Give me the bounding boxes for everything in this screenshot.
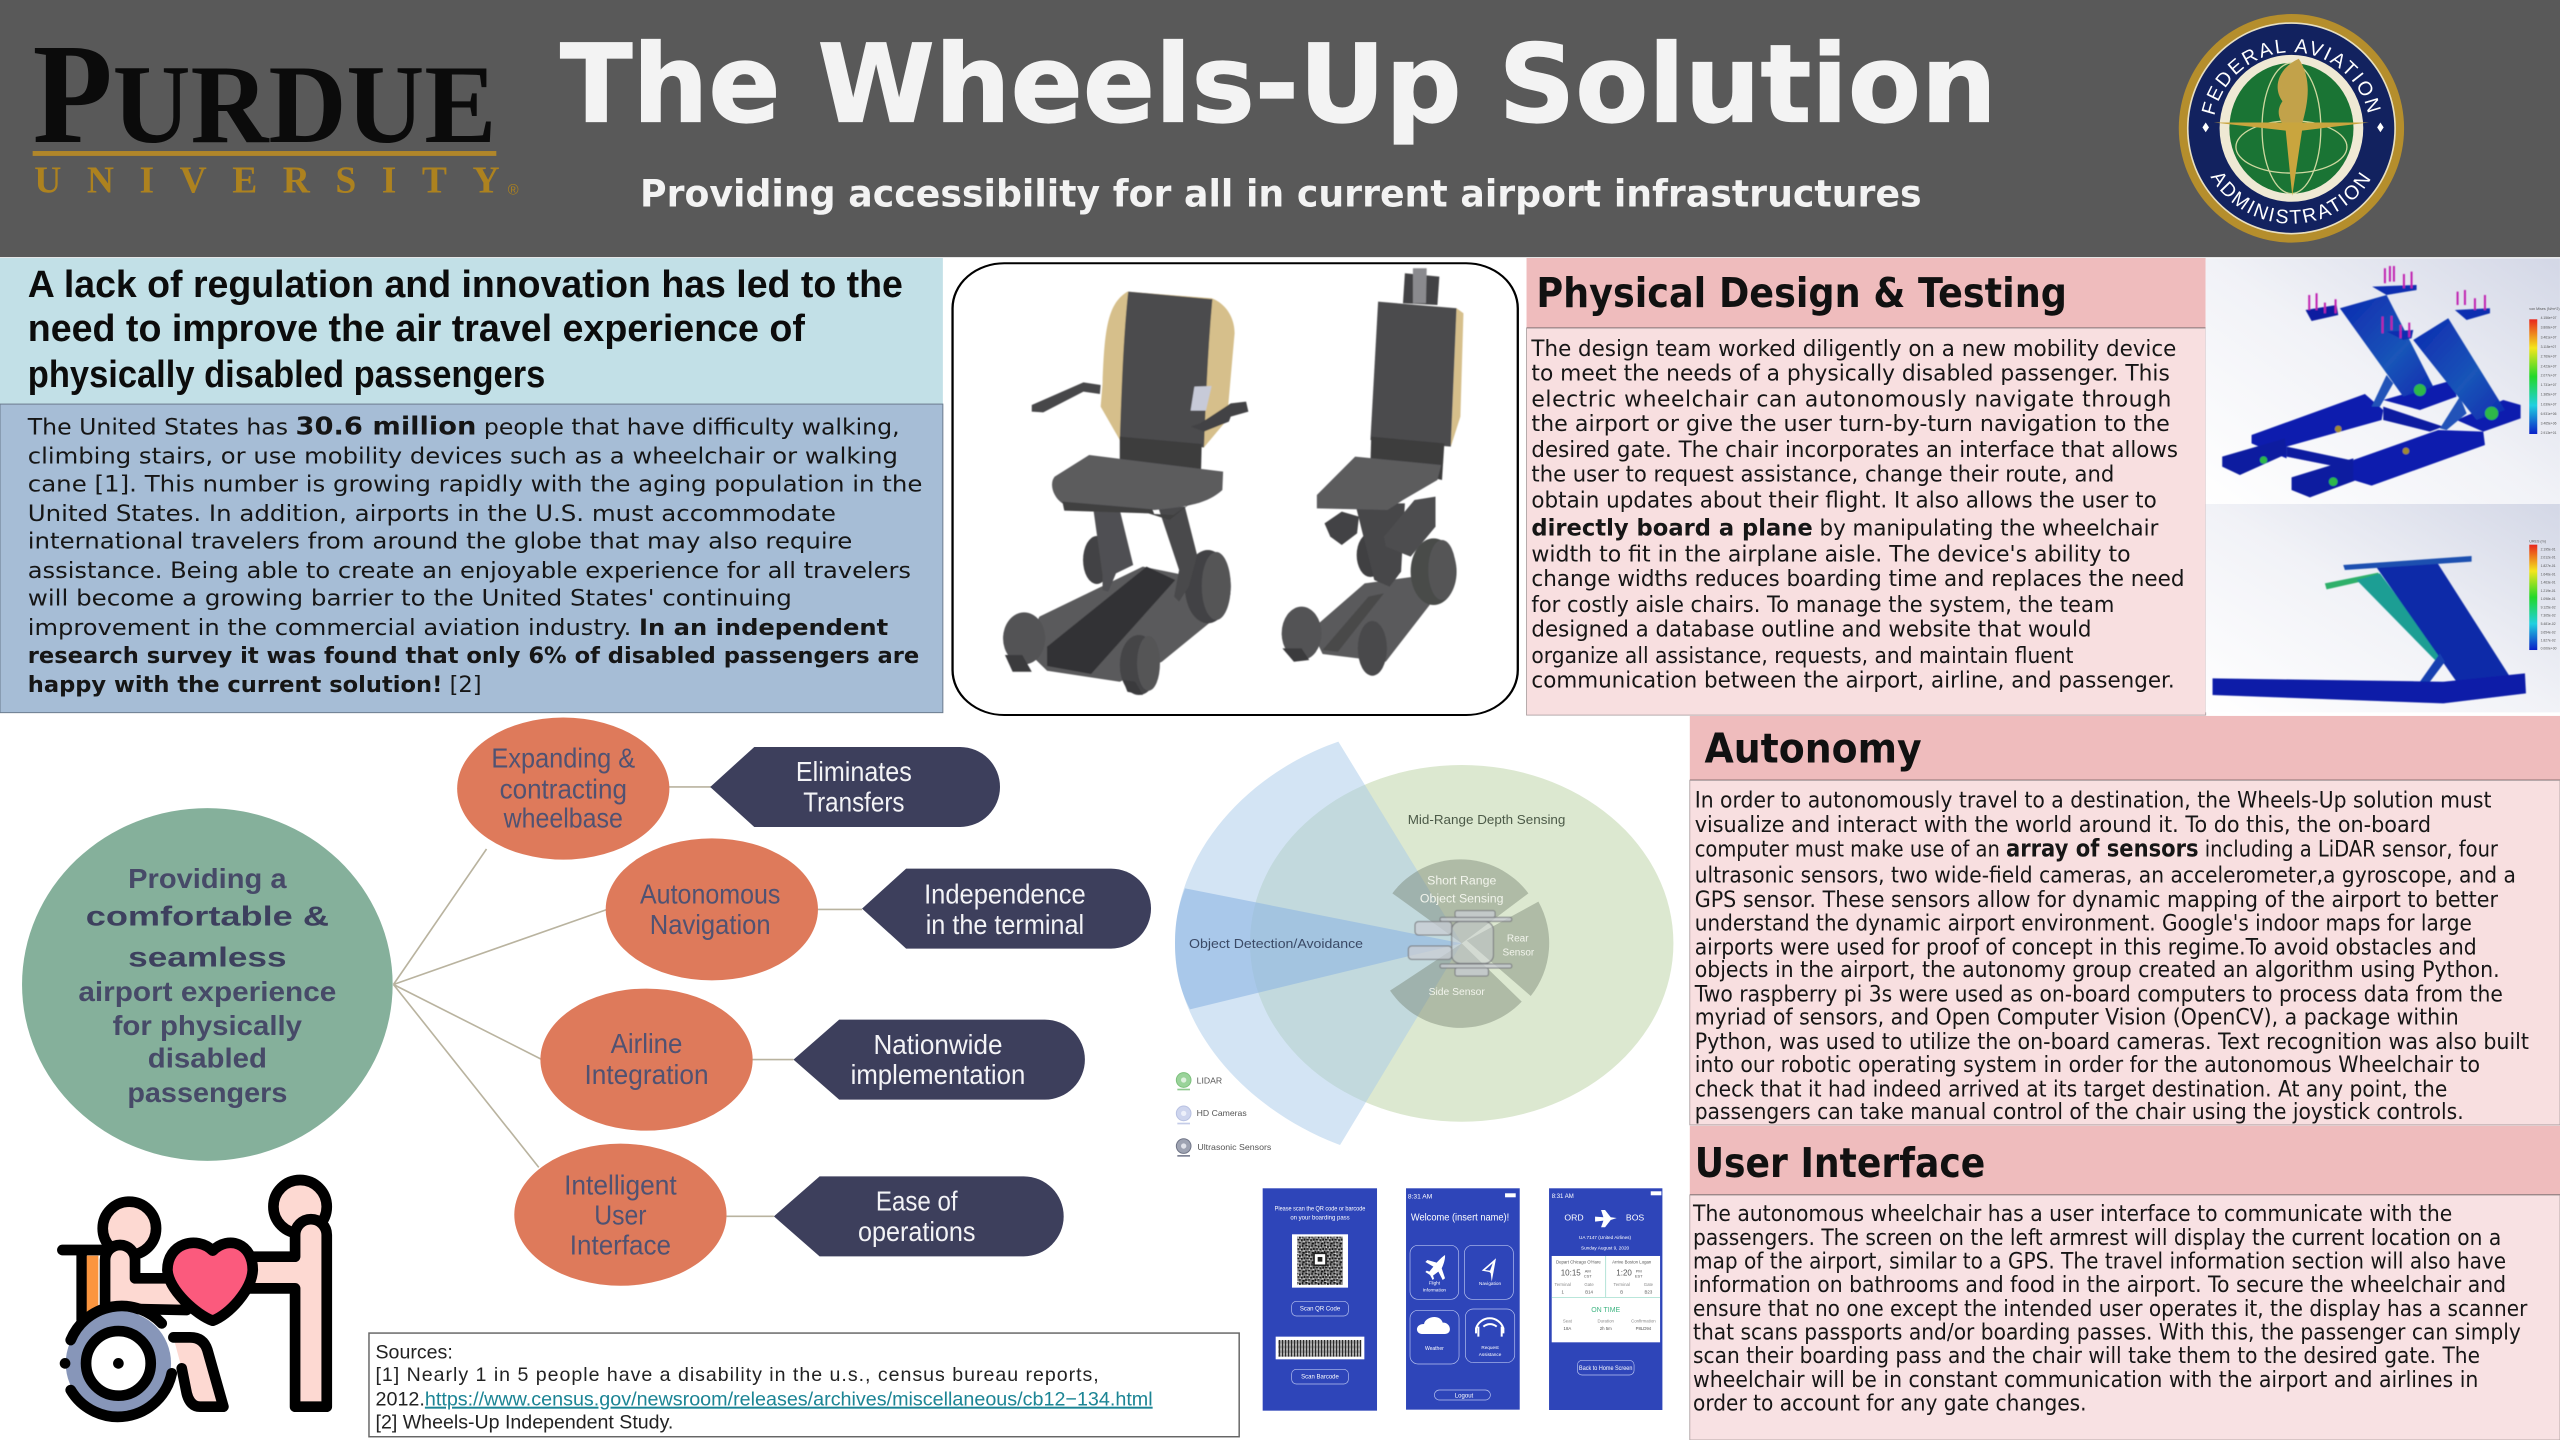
physical design body text: desired gate. The chair incorporates an interface that allows (1531, 438, 2178, 463)
phone: flight information: Gate (1644, 1282, 1654, 1287)
node: expanding wheelbase: contracting (500, 773, 627, 804)
autonomy body text (1690, 780, 2560, 1125)
user interface body text: wheelchair will be in constant communication with the airport and airlines in (1693, 1368, 2478, 1393)
legend: ultrasonic sensors (1176, 1139, 1272, 1157)
central node (22, 808, 393, 1161)
problem heading: need to improve the air travel experience of (28, 307, 805, 350)
legend: LIDAR: LIDAR (1197, 1075, 1222, 1085)
autonomy body text: myriad of sensors, and Open Computer Vision (OpenCV), a package within (1695, 1005, 2459, 1030)
tag: independence in the terminal (862, 869, 1151, 949)
phone: welcome menu: Assistance (1479, 1352, 1502, 1357)
problem body text: climbing stairs, or use mobility devices such as a wheelchair or walking (28, 445, 898, 470)
autonomy body text: objects in the airport, the autonomy group created an algorithm using Python. (1695, 958, 2500, 983)
phone: flight information: 1:20 (1616, 1269, 1632, 1278)
displacement legend: 1.463e-01 (2541, 581, 2556, 585)
stress legend: 1.039e+07 (2541, 402, 2557, 406)
phone: flight information (1549, 1188, 1662, 1410)
phone: welcome menu: Logout (1455, 1393, 1474, 1399)
sources box: Sources: (376, 1341, 453, 1363)
panel: FEA stress simulation images (2206, 258, 2560, 712)
legend: HD cameras: HD Cameras (1197, 1108, 1247, 1118)
autonomy body text: Python, was used to utilize the on-board cameras. Text recognition was also built (1695, 1030, 2529, 1055)
autonomy body text: into our robotic operating system in order for the autonomous Wheelchair to (1695, 1053, 2480, 1078)
displacement legend: 1.827e-01 (2541, 564, 2556, 568)
sources box: [2] Wheels-Up Independent Study. (376, 1412, 673, 1434)
physical design heading (1527, 258, 2206, 328)
problem body text: cane [1]. This number is growing rapidly with the aging population in the (28, 472, 922, 497)
phone: flight information: ON TIME (1591, 1307, 1621, 1314)
user interface body text: scan their boarding pass and the chair will take them to the desired gate. The (1693, 1344, 2480, 1369)
phone: scan boarding pass: Please scan the QR code or barcode (1275, 1207, 1366, 1213)
logo: FAA seal (2178, 14, 2404, 243)
object detection zone (1175, 742, 1462, 1145)
displacement legend (2529, 539, 2557, 651)
phone: flight information: Gate (1584, 1282, 1594, 1287)
stress legend: 2.077e+07 (2541, 374, 2557, 378)
node: airline integration: Airline (611, 1028, 682, 1059)
sources box: [1] Nearly 1 in 5 people have a disability in the u.s., census bureau reports, (376, 1364, 1099, 1386)
phone: flight information: Terminal (1555, 1282, 1571, 1287)
sensor labels: Object Sensing (1420, 892, 1504, 906)
header banner (0, 0, 2560, 258)
phone: flight information: Terminal (1614, 1282, 1630, 1287)
displacement legend: 2.195e-01 (2541, 547, 2556, 551)
displacement legend: 1.827e-02 (2541, 639, 2556, 643)
phone: flight information: Duration (1598, 1319, 1614, 1324)
phone: welcome menu: Welcome (insert name)! (1411, 1213, 1509, 1224)
side sensor sector (1390, 943, 1522, 1028)
physical design body text: The design team worked diligently on a new mobility device (1530, 337, 2176, 362)
sensor labels: Rear (1507, 933, 1529, 944)
phone: welcome menu: Information (1423, 1287, 1446, 1292)
problem body text: international travelers from around the globe that may also require (28, 530, 852, 555)
node: expanding wheelbase: Expanding & (491, 742, 636, 773)
phone: flight information: P8LD94 (1636, 1326, 1652, 1331)
autonomy body text: Two raspberry pi 3s were used as on-board computers to process data from the (1694, 983, 2503, 1008)
phone: flight information: 10:15 (1561, 1269, 1581, 1278)
physical design body text (1527, 328, 2206, 715)
displacement legend: 2.012e-01 (2541, 556, 2556, 560)
sources box: 2012.https://www.census.gov/newsroom/releases/archives/miscellaneous/cb12−134.html (376, 1389, 1153, 1411)
problem body text (0, 404, 943, 713)
stress legend: 2.769e+07 (2541, 355, 2557, 359)
stress legend: 1.731e+07 (2541, 383, 2557, 387)
node: expanding wheelbase (457, 718, 669, 860)
problem heading (0, 258, 943, 404)
central node: Providing a (128, 863, 287, 894)
phone: flight information: Back to Home Screen (1579, 1366, 1632, 1372)
tag: ease of operations: Ease of (876, 1186, 958, 1217)
physical design body text: the airport or give the user turn-by-turn navigation to the (1531, 412, 2170, 437)
phone: welcome menu: 8:31 AM (1408, 1193, 1432, 1200)
logo: Purdue University: ® (508, 182, 519, 198)
phone: flight information: EST (1635, 1273, 1643, 1278)
node: intelligent user interface (514, 1144, 727, 1286)
problem body text: assistance. Being able to create an enjoyable experience for all travelers (28, 559, 911, 584)
phone: scan boarding pass: Scan Barcode (1301, 1375, 1340, 1381)
displacement legend: 9.125e-02 (2541, 605, 2556, 609)
phone: welcome menu: Flight (1429, 1281, 1441, 1286)
phone: flight information: Sunday August 9, 2020 (1581, 1245, 1630, 1250)
panel: user interface (1690, 1126, 2560, 1440)
sensor coverage diagram (1175, 742, 1673, 1157)
tag: eliminates transfers: Eliminates (796, 756, 912, 787)
central node: passengers (127, 1077, 287, 1108)
central node: airport experience (78, 976, 336, 1007)
stress legend: 4.156e+07 (2541, 316, 2557, 320)
user interface body text: order to account for any gate changes. (1693, 1392, 2087, 1417)
user interface body text: map of the airport, similar to a GPS. The travel information section will also have (1693, 1250, 2506, 1275)
physical design body text: width to fit in the airplane aisle. The device's ability to (1531, 543, 2131, 568)
problem body text: research survey it was found that only 6% of disabled passengers are (28, 644, 919, 669)
displacement legend: 3.654e-02 (2541, 630, 2556, 634)
displacement legend: 1.098e-01 (2541, 597, 2556, 601)
user interface body text: The autonomous wheelchair has a user interface to communicate with the (1692, 1202, 2452, 1227)
autonomy heading: Autonomy (1704, 724, 1922, 772)
tag: nationwide implementation (793, 1020, 1085, 1100)
problem body text: will become a growing barrier to the United States' continuing (28, 587, 792, 612)
phone: flight information: UA 7147 (United Airlines) (1579, 1235, 1632, 1240)
node: autonomous navigation: Navigation (650, 909, 771, 940)
physical design body text: organize all assistance, requests, and maintain fluent (1531, 644, 2074, 669)
central node: seamless (128, 942, 287, 973)
physical design body text: for costly aisle chairs. To manage the system, the team (1531, 593, 2114, 618)
displacement legend: 5.481e-02 (2541, 622, 2556, 626)
title: The Wheels-Up Solution (560, 23, 1997, 148)
stress legend: von Mises (N/m^2) (2529, 307, 2560, 311)
phone: scan boarding pass (1263, 1188, 1377, 1411)
tag: nationwide implementation: Nationwide (873, 1029, 1002, 1060)
autonomy body text: check that it had indeed arrived at its target destination. At any point, the (1695, 1077, 2447, 1102)
stress legend: 3.115e+07 (2541, 345, 2556, 349)
user interface body text: passengers. The screen on the left armrest will display the current location on a (1693, 1226, 2501, 1251)
node: airline integration (540, 989, 753, 1131)
legend: HD cameras (1176, 1106, 1247, 1124)
phone: flight information: ORD (1564, 1213, 1584, 1223)
physical design body text: electric wheelchair can autonomously navigate through (1531, 388, 2171, 413)
autonomy body text: GPS sensor. These sensors allow for dynamic mapping of the airport to better (1695, 888, 2498, 913)
FEA stress plot (2206, 258, 2560, 504)
problem body text: happy with the current solution! [2] (28, 673, 482, 698)
legend: ultrasonic sensors: Ultrasonic Sensors (1197, 1142, 1272, 1152)
stress legend (2529, 307, 2560, 435)
problem body text: improvement in the commercial aviation industry. In an independent (28, 616, 888, 641)
autonomy body text: airports were used for proof of concept in this regime.To avoid obstacles and (1695, 935, 2477, 960)
node: expanding wheelbase: wheelbase (503, 803, 623, 834)
panel: autonomy (1690, 716, 2560, 1125)
stress legend: 1.385e+07 (2541, 393, 2557, 397)
stress legend: 3.465e+06 (2541, 422, 2557, 426)
phone: flight information: B23 (1645, 1289, 1653, 1294)
stress legend: 2.913e+01 (2541, 431, 2557, 435)
logo: Purdue University: UNIVERSITY (34, 161, 500, 202)
user interface body text: information on bathrooms and food in the airport. To secure the wheelchair and (1693, 1273, 2506, 1298)
phone: welcome menu (1406, 1188, 1520, 1410)
displacement legend: 1.646e-01 (2541, 572, 2556, 576)
logo: FAA seal: FEDERAL AVIATION (2202, 39, 2381, 114)
autonomy body text: In order to autonomously travel to a destination, the Wheels-Up solution must (1695, 788, 2492, 813)
phone: flight information: B (1620, 1289, 1623, 1294)
icon: wheelchair user and helper sharing a heart (60, 1180, 327, 1417)
phone: flight information: 1 (1562, 1289, 1565, 1294)
tag: nationwide implementation: implementation (851, 1059, 1025, 1090)
phone: flight information: Confirmation (1631, 1319, 1656, 1324)
connector lines (393, 787, 862, 1216)
physical design body text: change widths reduces boarding time and replaces the need (1531, 567, 2184, 592)
central node: for physically (113, 1010, 303, 1041)
node: intelligent user interface: User (594, 1199, 647, 1230)
user interface heading: User Interface (1695, 1139, 1985, 1187)
mind map diagram (22, 718, 1151, 1286)
tag: independence in the terminal: Independence (924, 879, 1086, 910)
stress legend: 3.461e+07 (2541, 335, 2557, 339)
displacement legend: 0.000e+00 (2541, 647, 2557, 651)
physical design body text: to meet the needs of a physically disabled passenger. This (1531, 361, 2170, 386)
phone: flight information: CST (1584, 1273, 1592, 1278)
stress legend: 3.808e+07 (2541, 326, 2557, 330)
autonomy body text: ultrasonic sensors, two wide-field cameras, an accelerometer,a gyroscope, and a (1695, 863, 2516, 888)
mid-range depth sensing zone (1250, 765, 1673, 1122)
sensor labels: Side Sensor (1429, 987, 1485, 998)
autonomy body text: passengers can take manual control of the chair using the joystick controls. (1695, 1100, 2464, 1125)
phone: flight information: Arrive Boston Logan (1612, 1259, 1652, 1264)
phone: flight information: 2h 5m (1600, 1326, 1612, 1331)
displacement legend: 1.219e-01 (2541, 589, 2556, 593)
phone: flight information: AM (1585, 1269, 1591, 1274)
panel: wheelchair renders (953, 263, 1518, 715)
sensor labels: Short Range (1427, 874, 1496, 888)
short range sensor sector (1392, 859, 1528, 943)
autonomy body text: understand the dynamic airport environment. Google's indoor maps for large (1695, 912, 2472, 937)
node: intelligent user interface: Interface (570, 1230, 671, 1261)
sources box (369, 1333, 1239, 1437)
autonomy body text: visualize and interact with the world around it. To do this, the on-board (1695, 813, 2431, 838)
displacement legend: URES (m) (2529, 539, 2546, 543)
chair: front three-quarter view (1003, 292, 1248, 695)
sensor labels (1189, 813, 1565, 998)
stress legend: 2.423e+07 (2541, 364, 2557, 368)
physical design heading: Physical Design & Testing (1536, 269, 2067, 317)
node: airline integration: Integration (584, 1059, 709, 1090)
user interface heading (1690, 1126, 2560, 1195)
phone: flight information: 18A (1564, 1326, 1571, 1331)
phone: flight information: B14 (1585, 1289, 1593, 1294)
physical design body text: directly board a plane by manipulating the wheelchair (1531, 515, 2158, 542)
displacement legend: 7.305e-02 (2541, 614, 2556, 618)
autonomy body text: computer must make use of an array of sensors including a LiDAR sensor, four (1695, 834, 2498, 862)
tag: eliminates transfers: Transfers (803, 786, 904, 817)
legend: LIDAR (1176, 1073, 1222, 1090)
tag: eliminates transfers (710, 747, 1000, 827)
problem body text: The United States has 30.6 million people that have difficulty walking, (27, 411, 900, 440)
phone: welcome menu: Navigation (1479, 1281, 1501, 1286)
phone: flight information: 8:31 AM (1552, 1194, 1574, 1200)
sensor labels: Sensor (1503, 948, 1535, 959)
phone: flight information: BOS (1626, 1213, 1644, 1223)
subtitle: Providing accessibility for all in current airport infrastructures (640, 172, 1922, 216)
physical design body text: designed a database outline and website that would (1531, 618, 2091, 643)
sensor labels: Mid-Range Depth Sensing (1408, 813, 1565, 827)
app screens mockups (1263, 1188, 1662, 1411)
problem body text: United States. In addition, airports in the U.S. must accommodate (28, 502, 836, 527)
problem heading: A lack of regulation and innovation has led to the (28, 263, 903, 306)
node: autonomous navigation: Autonomous (640, 879, 780, 910)
FEA displacement plot (2206, 504, 2560, 712)
phone: scan boarding pass: Scan QR Code (1300, 1307, 1341, 1313)
physical design body text: obtain updates about their flight. It also allows the user to (1531, 489, 2157, 514)
panel: problem statement (0, 258, 943, 713)
problem heading: physically disabled passengers (28, 353, 545, 396)
physical design body text: communication between the airport, airline, and passenger. (1531, 668, 2175, 693)
phone: flight information: PM (1636, 1269, 1642, 1274)
tag: ease of operations (774, 1176, 1064, 1256)
logo: FAA seal: ADMINISTRATION (2210, 172, 2370, 224)
tag: independence in the terminal: in the terminal (926, 909, 1084, 940)
phone: flight information: Depart Chicago O'Hare (1556, 1259, 1601, 1264)
tag: ease of operations: operations (858, 1216, 976, 1247)
phone: welcome menu: Request (1481, 1345, 1499, 1350)
user interface body text (1690, 1195, 2560, 1440)
stress legend: 6.931e+06 (2541, 412, 2557, 416)
chair: narrowed side view (1282, 268, 1463, 676)
phone: scan boarding pass: on your boarding pass (1290, 1215, 1350, 1221)
object detection/avoidance wedge (1175, 888, 1462, 1009)
phone: welcome menu: Weather (1425, 1346, 1444, 1352)
sensor labels: Object Detection/Avoidance (1189, 937, 1363, 951)
phone: flight information: Seat (1563, 1319, 1573, 1324)
autonomy heading (1690, 716, 2560, 780)
central node: comfortable & (86, 901, 329, 932)
rear sensor sector (1467, 902, 1549, 996)
node: intelligent user interface: Intelligent (564, 1169, 677, 1200)
physical design body text: the user to request assistance, change their route, and (1531, 463, 2114, 488)
wheelchair top view (1408, 911, 1512, 976)
logo: Purdue University: URDUE (113, 43, 496, 167)
node: autonomous navigation (606, 838, 818, 980)
logo: Purdue University: P (33, 15, 113, 174)
logo: Purdue University (33, 15, 519, 202)
panel: physical design and testing (1527, 258, 2206, 715)
central node: disabled (148, 1043, 267, 1074)
